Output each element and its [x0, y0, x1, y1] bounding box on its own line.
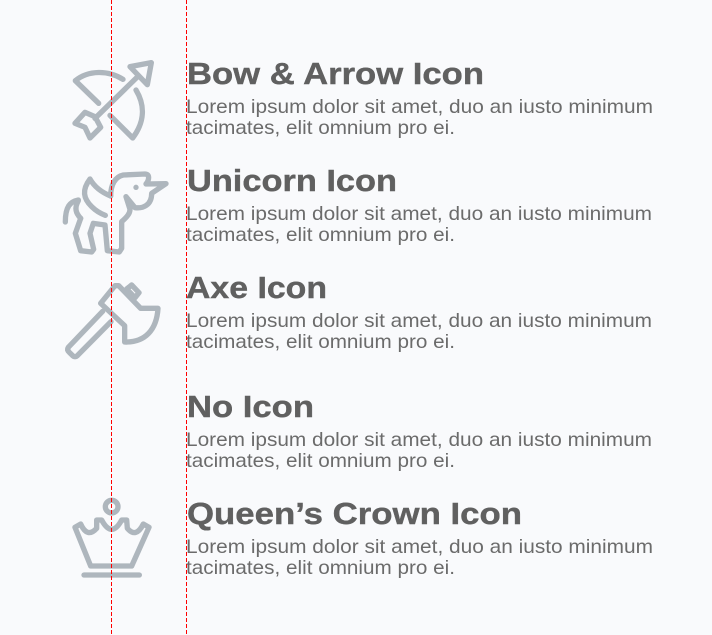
text block: bow and arrow description: Lorem ipsum dolor sit amet, duo an iusto minimum [186, 96, 653, 118]
icon: axe [68, 285, 158, 357]
icon: queen's crown [75, 500, 149, 575]
panel: queen's crown row [75, 496, 653, 579]
heading: queen's crown: Queen’s Crown Icon [187, 496, 522, 531]
text block: no icon description: tacimates, elit omnium pro ei. [186, 450, 455, 472]
text block: unicorn description: tacimates, elit omnium pro ei. [186, 224, 455, 246]
heading: bow and arrow: Bow & Arrow Icon [187, 56, 484, 91]
panel: no icon row [186, 389, 652, 472]
text block: unicorn description: Lorem ipsum dolor sit amet, duo an iusto minimum [186, 203, 652, 225]
text block: no icon description: Lorem ipsum dolor sit amet, duo an iusto minimum [186, 429, 652, 451]
heading: unicorn: Unicorn Icon [187, 163, 397, 198]
text block: axe description: tacimates, elit omnium pro ei. [186, 331, 455, 353]
panel: axe row [68, 270, 652, 357]
text block: queen's crown description: tacimates, elit omnium pro ei. [186, 557, 455, 579]
text block: bow and arrow description: tacimates, elit omnium pro ei. [186, 117, 455, 139]
icon: unicorn [65, 174, 166, 252]
panel: bow and arrow row [75, 56, 653, 139]
heading: no icon: No Icon [187, 389, 314, 424]
icon: bow and arrow [75, 63, 151, 138]
text block: queen's crown description: Lorem ipsum dolor sit amet, duo an iusto minimum [186, 536, 653, 558]
heading: axe: Axe Icon [186, 270, 327, 305]
panel: unicorn row [65, 163, 652, 252]
text block: axe description: Lorem ipsum dolor sit amet, duo an iusto minimum [186, 310, 652, 332]
